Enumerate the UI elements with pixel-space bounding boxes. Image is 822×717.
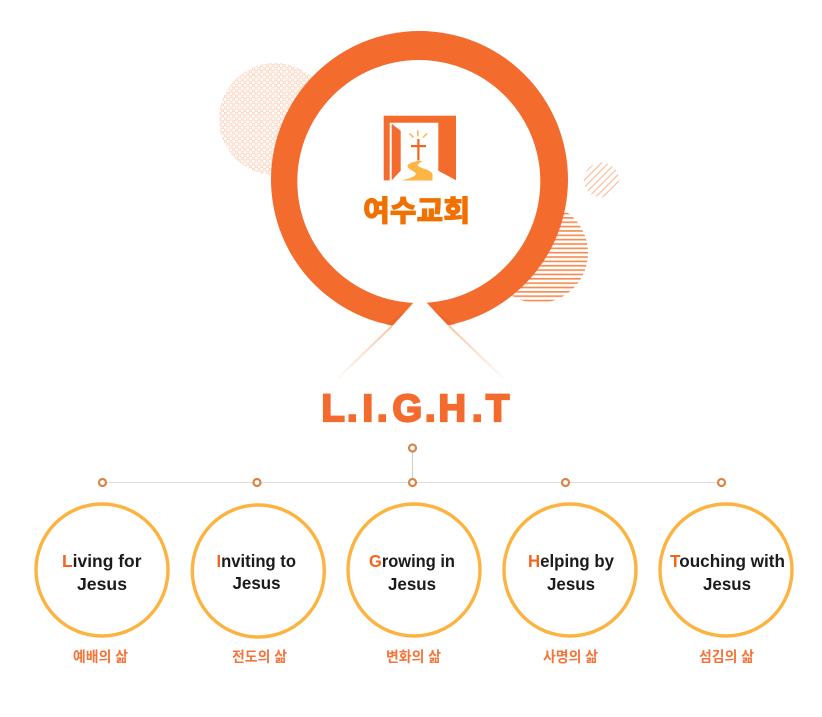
item: Living for Jesus: Living for (62, 551, 142, 571)
church logo icon (384, 116, 456, 181)
item: Inviting to Jesus: Jesus (232, 573, 281, 593)
striped decorative circle (488, 203, 588, 303)
item: Helping by Jesus: Jesus (547, 574, 595, 594)
dotted decorative circle (219, 63, 331, 175)
item: Helping by Jesus (504, 504, 636, 666)
item: Inviting to Jesus: 전도의 삶 (232, 649, 287, 666)
heading L.I.G.H.T: L.I.G.H.T (322, 388, 509, 430)
item: Growing in Jesus: Growing in (369, 551, 455, 571)
item: Growing in Jesus: 변화의 삶 (386, 649, 441, 666)
item: Touching with Jesus (660, 504, 792, 666)
item: Growing in Jesus: Jesus (388, 574, 436, 594)
light rays below ring (338, 326, 503, 378)
item: Helping by Jesus: 사명의 삶 (543, 649, 598, 666)
item: Touching with Jesus: Jesus (703, 574, 751, 594)
item: Living for Jesus: 예배의 삶 (73, 649, 128, 666)
item: Inviting to Jesus (192, 505, 324, 666)
item: Touching with Jesus: 섬김의 삶 (699, 649, 754, 666)
item: Growing in Jesus (348, 504, 480, 666)
item: Helping by Jesus: Helping by (528, 551, 614, 571)
item: Inviting to Jesus: Inviting to (216, 551, 296, 571)
item: Living for Jesus (36, 504, 168, 666)
hatched decorative circle (584, 162, 619, 198)
connector tree (99, 444, 725, 486)
main orange ring (271, 31, 568, 335)
church name: 여수교회 (363, 195, 470, 228)
item: Touching with Jesus: Touching with (670, 551, 785, 571)
item: Living for Jesus: Jesus (77, 574, 127, 594)
